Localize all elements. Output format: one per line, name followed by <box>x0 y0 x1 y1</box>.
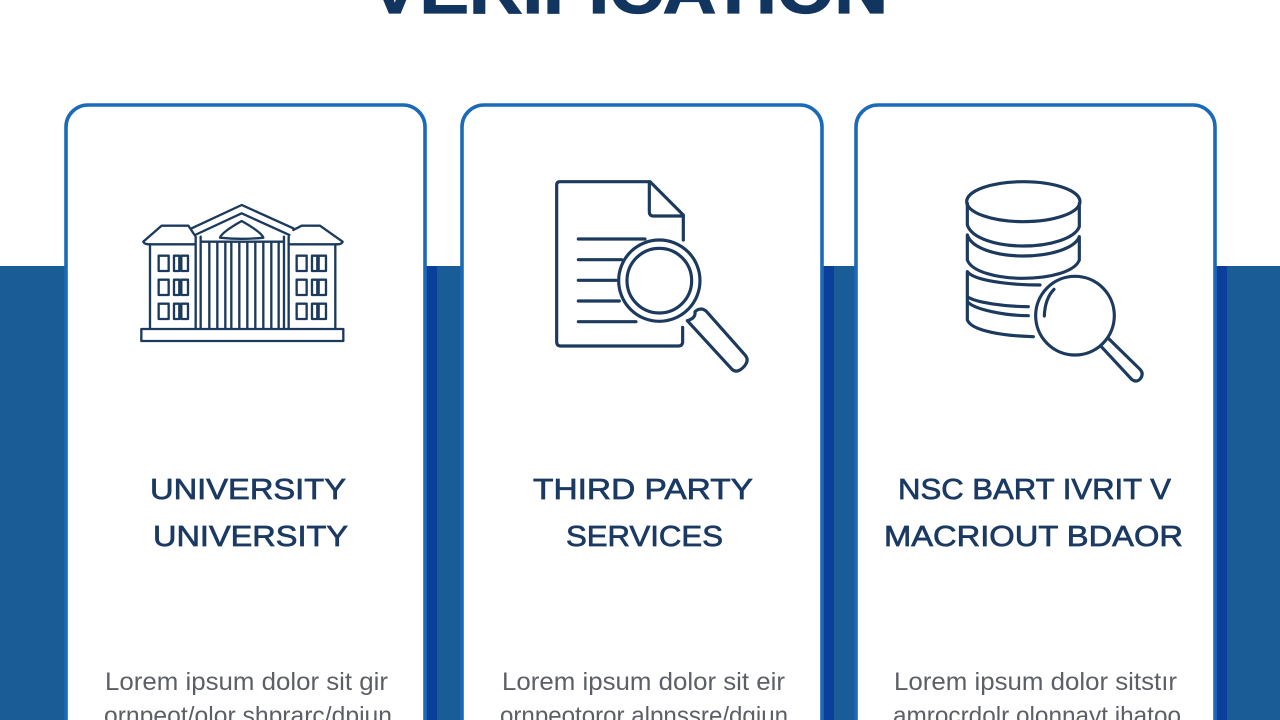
body text: third party services <box>500 668 788 720</box>
card frame <box>462 105 822 720</box>
body text: database <box>893 668 1181 720</box>
panel: university <box>66 105 425 720</box>
heading: database: NSC BART IVRIT V <box>898 474 1172 506</box>
background band <box>0 266 1280 720</box>
icon: database with magnifier <box>967 182 1142 381</box>
heading: university <box>150 474 348 553</box>
panel: third party services <box>462 105 822 720</box>
card frame <box>66 105 425 720</box>
icon: university building <box>141 205 343 341</box>
icon: document with magnifier <box>557 182 747 371</box>
card frame <box>856 105 1215 720</box>
panel: database <box>856 105 1215 720</box>
heading: database: MACRIOUT BDAOR <box>884 521 1183 553</box>
body text: university <box>104 668 392 720</box>
heading: database <box>884 474 1183 553</box>
heading: university: UNIVERSITY <box>153 521 348 553</box>
heading: third party services: SERVICES <box>566 521 723 553</box>
heading: third party services <box>533 474 753 553</box>
body text: university: Lorem ipsum dolor sit gir <box>105 668 388 696</box>
heading: university: UNIVERSITY <box>150 474 346 506</box>
body text: third party services: Lorem ipsum dolor sit eir <box>502 668 785 696</box>
body text: database: Lorem ipsum dolor sitstır <box>894 668 1177 696</box>
heading: third party services: THIRD PARTY <box>533 474 753 506</box>
